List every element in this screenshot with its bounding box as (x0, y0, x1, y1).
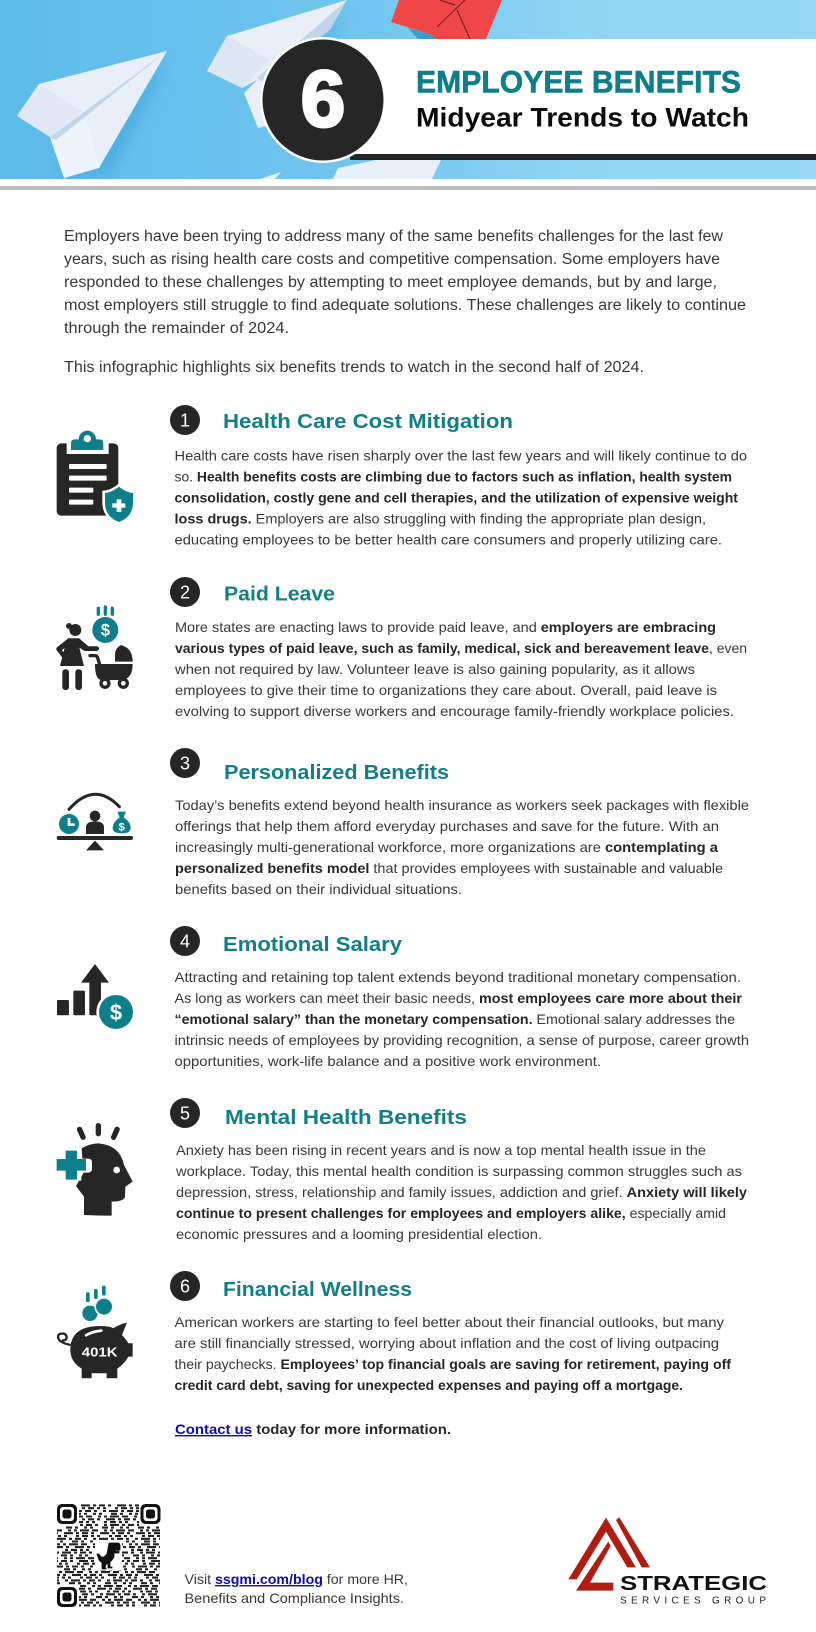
body 2: various types of paid leave, such as family, medical, sick and bereavement leave, even (175, 640, 747, 656)
number badge 6: 6 (180, 1276, 190, 1296)
body 1 (174, 448, 747, 548)
body 4 (174, 969, 749, 1069)
number badge 1 (170, 405, 200, 435)
section 5: Mental Health Benefits (55, 1098, 747, 1242)
body 4: Attracting and retaining top talent extends beyond traditional monetary compensation. (174, 969, 741, 985)
number badge 2: 2 (180, 582, 190, 602)
body 3: Today’s benefits extend beyond health insurance as workers seek packages with flexible (175, 797, 749, 813)
heading 2: Paid Leave (224, 583, 335, 606)
intro text: This infographic highlights six benefits trends to watch in the second half of 2024. (64, 359, 644, 376)
number badge 3 (170, 748, 200, 778)
number badge 6 (170, 1271, 200, 1301)
subtitle: Midyear Trends to Watch (416, 103, 749, 133)
body 4: opportunities, work-life balance and a positive work environment. (174, 1053, 601, 1069)
body 1: consolidation, costly gene and cell therapies, and the utilization of expensive weight (174, 490, 738, 506)
body 1: educating employees to be better health care consumers and properly utilizing care. (174, 532, 722, 548)
heading 5: Mental Health Benefits (225, 1106, 467, 1129)
body 4: intrinsic needs of employees by providing recognition, a sense of purpose, career growth (174, 1032, 749, 1048)
body 3: increasingly multi-generational workforce, more organizations are contemplating a (175, 839, 718, 855)
heading 3: Personalized Benefits (224, 761, 449, 784)
body 3: personalized benefits model that provides employees with sustainable and valuable (175, 860, 723, 876)
footer text (184, 1571, 408, 1606)
QR code (55, 1502, 162, 1609)
number badge 4 (170, 926, 200, 956)
body 1: so. Health benefits costs are climbing due to factors such as inflation, health system (174, 468, 732, 484)
icon: 401K piggy bank (58, 1286, 133, 1378)
intro text: responded to these challenges by attempting to meet employee demands, but by and large, (64, 274, 717, 291)
body 4: “emotional salary” than the monetary compensation. Emotional salary addresses the (174, 1011, 735, 1027)
body 3: offerings that help them afford everyday purchases and save for the future. With an (175, 818, 719, 834)
body 2: employees to give their time to organizations they care about. Overall, paid leave is (175, 682, 717, 698)
body 5: continue to present challenges for employees and employers alike, especially amid (176, 1205, 726, 1221)
number badge 3: 3 (180, 754, 190, 774)
body 5 (175, 1142, 747, 1242)
icon: balance scale with person, clock, money bag (57, 794, 133, 850)
body 2: evolving to support diverse workers and encourage family-friendly workplace policies. (175, 703, 734, 719)
logo mark (568, 1517, 650, 1591)
heading 1: Health Care Cost Mitigation (223, 410, 513, 433)
banner photo: paper planes on blue (0, 0, 816, 179)
body 2: when not required by law. Volunteer leave is also gaining popularity, as it allows (174, 661, 695, 677)
section 1: Health Care Cost Mitigation (57, 405, 747, 548)
intro text: through the remainder of 2024. (64, 320, 289, 337)
body 6: are still financially stressed, worrying about inflation and the cost of living outpacing (174, 1335, 719, 1351)
body 2: More states are enacting laws to provide paid leave, and employers are embracing (175, 619, 716, 635)
intro text: most employers still struggle to find adequate solutions. These challenges are likely to continue (64, 297, 746, 314)
body 1: Health care costs have risen sharply over the last few years and will likely continue to do (174, 448, 747, 464)
section 3: Personalized Benefits (57, 748, 749, 897)
logo wordmark: STRATEGIC (620, 1572, 767, 1595)
number circle (260, 37, 386, 163)
number badge 1: 1 (180, 410, 190, 430)
body 5: economic pressures and a looming presidential election. (176, 1226, 542, 1242)
footer text: Visit ssgmi.com/blog for more HR, (184, 1571, 408, 1587)
body 1: loss drugs. Employers are also struggling with finding the appropriate plan design, (174, 510, 706, 526)
section 6: Financial Wellness (58, 1271, 731, 1393)
body 6: credit card debt, saving for unexpected expenses and paying off a mortgage. (174, 1377, 683, 1393)
body 5: depression, stress, relationship and family issues, addiction and grief. Anxiety will likely (176, 1184, 747, 1200)
body 5: workplace. Today, this mental health condition is surpassing common struggles such as (175, 1163, 742, 1179)
heading 6: Financial Wellness (223, 1278, 412, 1301)
title ribbon (340, 39, 816, 154)
icon: dinosaur (97, 1543, 120, 1569)
title: EMPLOYEE BENEFITS (416, 63, 741, 99)
footer text: Benefits and Compliance Insights. (184, 1590, 404, 1606)
header banner (0, 0, 816, 179)
body 4: As long as workers can meet their basic needs, most employees care more about their (174, 990, 743, 1006)
icon: head with medical cross (55, 1123, 133, 1216)
section 2: Paid Leave (56, 577, 747, 719)
icon: clipboard with shield (57, 431, 136, 525)
intro text (64, 228, 746, 376)
body 6 (174, 1314, 731, 1393)
icon: balance scale with person, clock, money bag: $ (118, 822, 125, 834)
intro text: years, such as rising health care costs and competitive compensation. Some employers have (64, 251, 720, 268)
number badge 5 (170, 1098, 200, 1128)
heading 4: Emotional Salary (223, 933, 403, 956)
number badge 2 (170, 577, 200, 607)
body 2 (174, 619, 747, 719)
intro text: Employers have been trying to address many of the same benefits challenges for the last few (64, 228, 724, 245)
body 3 (175, 797, 749, 897)
call to action: Contact us today for more information. (175, 1421, 451, 1437)
icon: mother with stroller and dollar (56, 605, 133, 690)
body 6: American workers are starting to feel better about their financial outlooks, but many (174, 1314, 724, 1330)
body 5: Anxiety has been rising in recent years and is now a top mental health issue in the (176, 1142, 706, 1158)
body 6: their paychecks. Employees’ top financial goals are saving for retirement, paying off (174, 1356, 731, 1372)
section 4: Emotional Salary (57, 926, 749, 1069)
logo: Strategic Services Group: SERVICES GROUP (620, 1595, 766, 1606)
icon: growth bars with arrow and dollar (57, 964, 136, 1032)
icon: mother with stroller and dollar: $ (101, 621, 111, 640)
icon: growth bars with arrow and dollar: $ (110, 1000, 122, 1025)
number badge 4: 4 (180, 932, 190, 952)
logo: Strategic Services Group (568, 1517, 767, 1606)
icon: 401K piggy bank: 401K (82, 1345, 118, 1360)
number circle: 6 (301, 54, 345, 143)
body 3: benefits based on their individual situations. (175, 881, 462, 897)
number badge 5: 5 (180, 1104, 190, 1124)
